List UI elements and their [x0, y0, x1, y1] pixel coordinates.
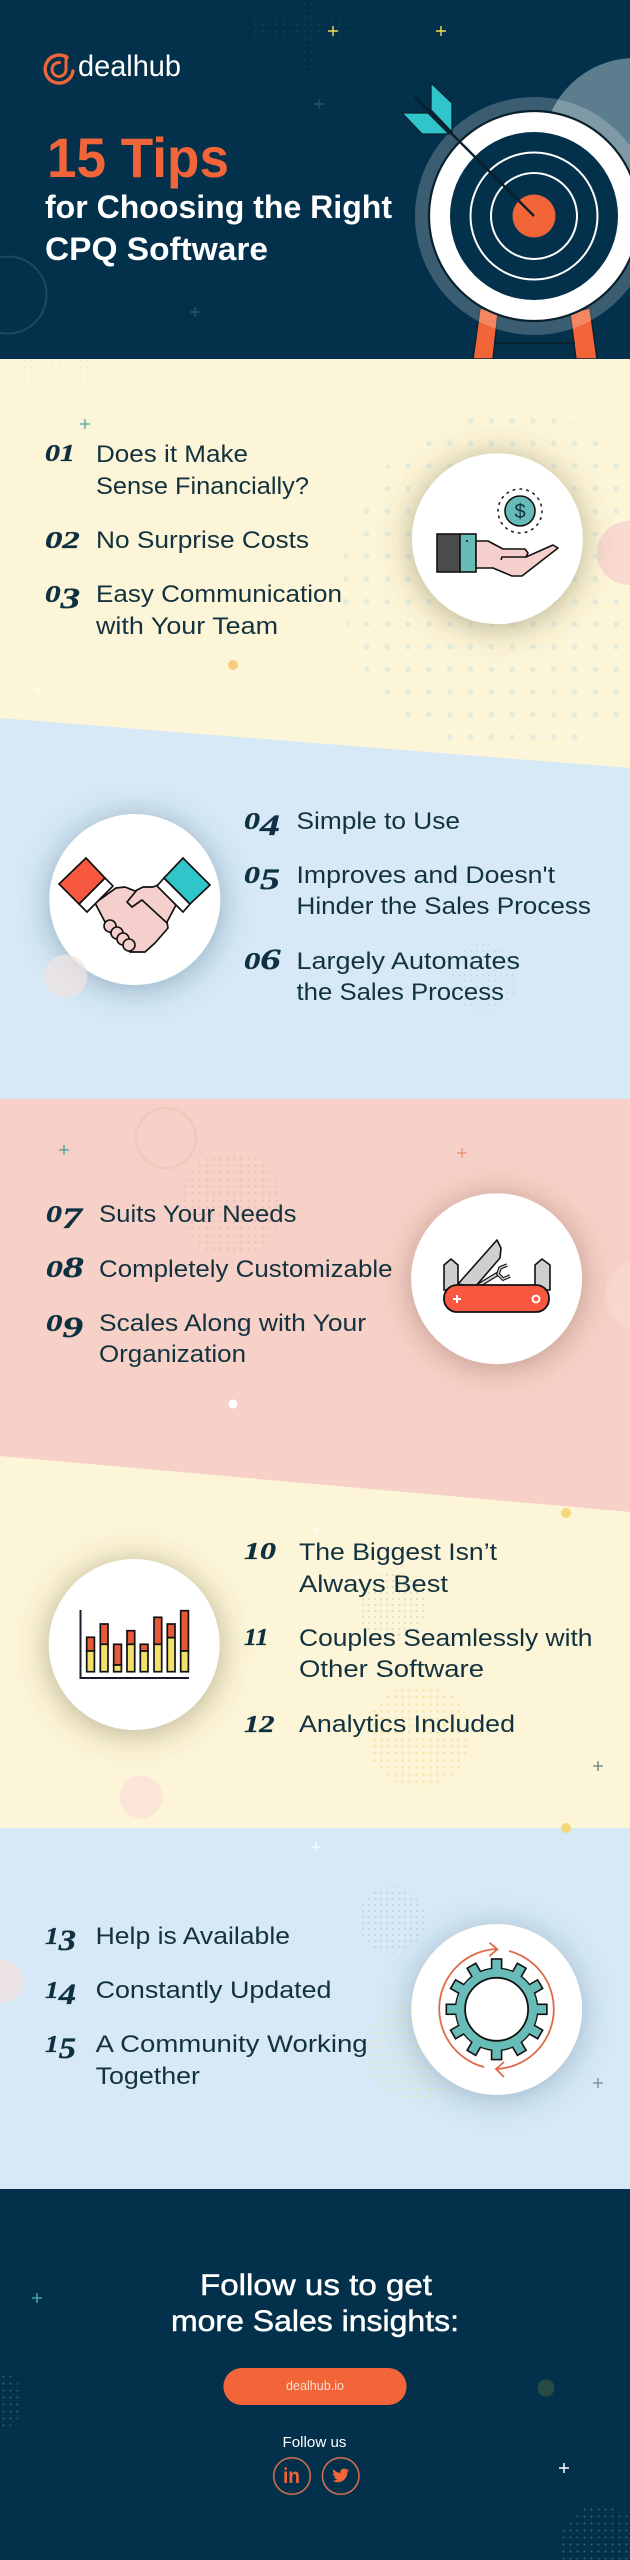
tip 13: Help is Available [96, 1923, 290, 1950]
tip 11 [244, 1625, 592, 1683]
tip 03: 3 [59, 581, 80, 615]
decorative outline circle [0, 256, 46, 334]
tip 14: 1 [45, 1977, 59, 2004]
icon: linkedin [274, 2458, 310, 2494]
tip 09: 0 [46, 1310, 62, 1337]
icon: target with arrow [402, 58, 630, 359]
tip 05: Improves and Doesn't [296, 862, 555, 889]
tip 03: with Your Team [95, 613, 278, 640]
tip 10 [244, 1539, 497, 1598]
panel: header [0, 0, 630, 359]
footer heading: more Sales insights: [171, 2305, 459, 2338]
panel: footer [0, 2189, 630, 2560]
tip 05: 5 [260, 863, 280, 896]
tip 04: 0 [244, 809, 260, 835]
button: dealhub.io [223, 2368, 407, 2405]
title: 15 Tips [47, 126, 229, 189]
tip 07: 7 [62, 1202, 83, 1235]
icon: bar chart [46, 1559, 222, 1736]
icon: gear with cycle arrows [409, 1924, 585, 2101]
panel: tips 13-15 [0, 1823, 630, 2189]
panel: tips 10-12 [0, 1456, 630, 1829]
tip 15: Together [96, 2063, 200, 2090]
tip 12: 12 [244, 1711, 275, 1737]
tip 06: Largely Automates [296, 948, 520, 975]
button: dealhub.io: dealhub.io [286, 2378, 344, 2393]
tip 06: 06 [244, 942, 281, 976]
icon: hand with coin: $ [514, 501, 526, 523]
tip 13: 3 [58, 1923, 76, 1956]
tip 12: Analytics Included [299, 1711, 515, 1738]
tip 07: 0 [46, 1202, 62, 1228]
title [45, 126, 392, 267]
plus marks [190, 26, 446, 317]
tip 02: No Surprise Costs [96, 527, 309, 554]
tip 10: Always Best [299, 1571, 448, 1598]
icon: linkedin: in [283, 2465, 300, 2488]
tip 01: Does it Make [96, 441, 248, 468]
tip 04: 4 [259, 809, 280, 842]
tip 05: 0 [244, 863, 260, 889]
tip 03 [45, 581, 342, 640]
tip 04: Simple to Use [296, 808, 460, 835]
tip 01: Sense Financially? [96, 473, 309, 500]
tip 10: The Biggest Isn’t [299, 1539, 497, 1566]
footer heading: Follow us to get [200, 2269, 433, 2302]
tip 13: 1 [45, 1923, 59, 1950]
tip 14: Constantly Updated [96, 1977, 331, 2004]
title: CPQ Software [45, 231, 268, 267]
tip 01 [45, 440, 309, 500]
tip 09: Scales Along with Your [99, 1310, 366, 1337]
tip 02: 02 [45, 527, 80, 554]
icon: hand with coin [409, 453, 585, 630]
follow us label: Follow us [282, 2435, 346, 2451]
tip 14: 4 [58, 1977, 76, 2010]
icon: swiss army knife [409, 1193, 585, 1370]
tip 11: 11 [244, 1625, 268, 1651]
tip 06: the Sales Process [296, 979, 504, 1006]
tip 03: Easy Communication [96, 581, 342, 608]
tip 05 [244, 862, 591, 920]
title: for Choosing the Right [45, 189, 392, 225]
icon: twitter [322, 2458, 359, 2494]
tip 10: 10 [244, 1539, 276, 1565]
tip 04 [244, 808, 460, 842]
logo: dealhub [78, 50, 181, 83]
panel: tips 01-03 [0, 359, 630, 769]
tip 09: 9 [62, 1310, 83, 1344]
icon: handshake [47, 814, 223, 991]
tip 15: 5 [59, 2031, 76, 2064]
tip 07 [46, 1201, 296, 1235]
tip 15: A Community Working [96, 2031, 368, 2058]
panel: tips 07-09 [0, 1099, 630, 1514]
tip 08: Completely Customizable [99, 1256, 392, 1283]
tip 07: Suits Your Needs [99, 1201, 296, 1228]
tip 03: 0 [45, 581, 61, 608]
tip 08: 08 [46, 1250, 84, 1284]
tip 13 [45, 1923, 290, 1956]
tip 08 [46, 1250, 392, 1284]
footer heading [171, 2269, 459, 2338]
tip 06 [244, 942, 520, 1006]
tip 09 [46, 1310, 366, 1368]
tip 11: Couples Seamlessly with [299, 1625, 592, 1652]
tip 05: Hinder the Sales Process [296, 893, 591, 920]
tip 14 [45, 1977, 332, 2010]
tip 09: Organization [99, 1341, 246, 1368]
tip 01: 01 [45, 440, 75, 466]
tip 15: 1 [45, 2031, 59, 2058]
tip 15 [45, 2031, 368, 2090]
panel: tips 04-06 [0, 718, 630, 1099]
tip 11: Other Software [299, 1656, 484, 1683]
